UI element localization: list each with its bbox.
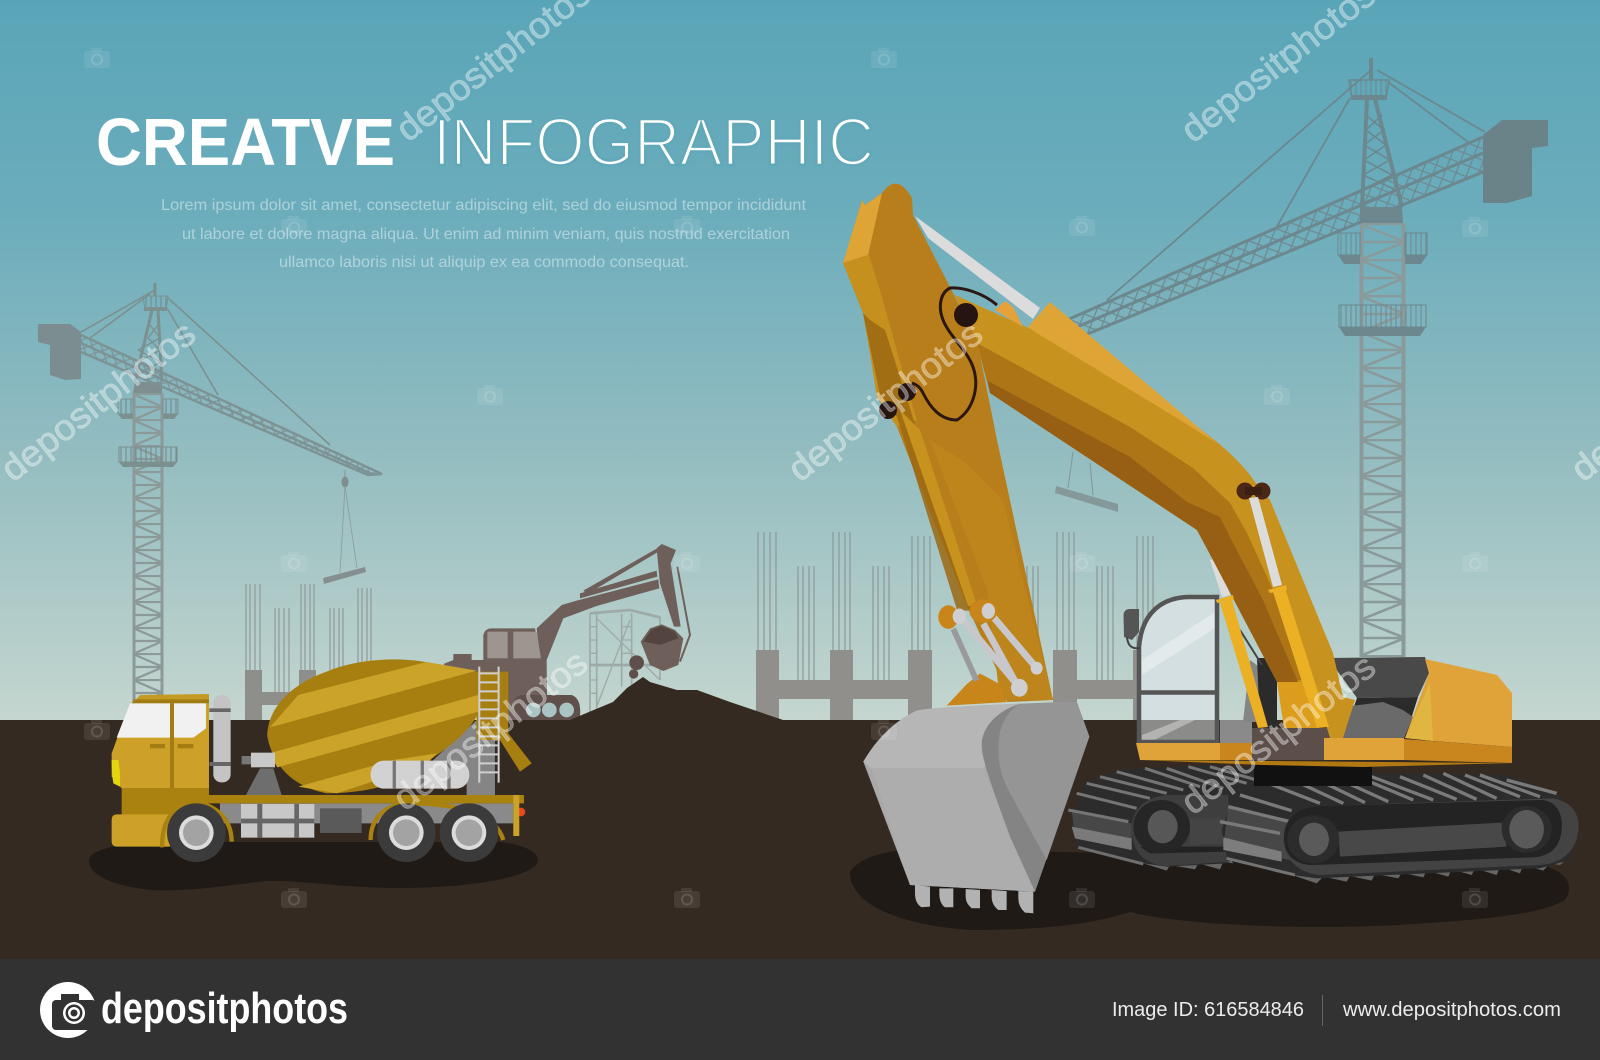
soil mound (560, 677, 795, 724)
excavator bucket (863, 702, 1089, 913)
ground (0, 720, 1600, 960)
rear light (517, 808, 525, 816)
mixer drum (267, 659, 477, 793)
right tower crane (1067, 58, 1548, 657)
near track (1220, 773, 1578, 883)
footer logo wordmark: depositphotos (101, 984, 348, 1033)
machinery behind boom (1220, 630, 1277, 743)
right crane hanging beam (1055, 452, 1118, 512)
diagonal watermarks: depositphotos (780, 312, 990, 489)
foundation columns and rebar right (756, 532, 1155, 720)
left tower crane (38, 283, 382, 720)
bucket teeth (915, 885, 1033, 913)
excavator upper deck (1136, 728, 1512, 767)
sky background (0, 0, 1600, 721)
cab (112, 703, 209, 788)
drum stripes (269, 662, 478, 793)
foundation columns and rebar left (245, 584, 375, 720)
rear wheel 1 (377, 803, 436, 862)
arm cylinder (1249, 497, 1329, 728)
elbow pins (1236, 482, 1270, 500)
diagonal watermarks (0, 0, 1600, 822)
footer bar (0, 959, 1600, 1060)
rear wheel 2 (440, 803, 498, 862)
water tank (371, 761, 469, 789)
fenders (162, 803, 503, 847)
image id: Image ID: 616584846 (1112, 999, 1304, 1021)
excavator crawler tracks (1068, 765, 1578, 883)
drum mount (242, 756, 252, 764)
intro paragraph: ut labore et dolore magna aliqua. Ut enim ad minim veniam, quis nostrud exercitation (182, 226, 790, 243)
diagonal watermarks: depositphotos (385, 641, 595, 818)
hydraulic hose and pivots (879, 288, 997, 420)
excavator cab (1124, 597, 1217, 742)
diagonal watermarks: depositphotos (1173, 645, 1383, 822)
engine housing (1328, 657, 1512, 747)
truck shadow (89, 842, 538, 890)
front wheel (167, 803, 226, 862)
excavator shadow (850, 849, 1569, 930)
intro paragraph (161, 197, 807, 271)
title (96, 105, 874, 180)
boom cylinder rod (915, 216, 1040, 319)
footer logo icon (40, 982, 96, 1038)
cement mixer truck (112, 659, 532, 862)
title: CREATVE (96, 105, 395, 180)
intro paragraph: ullamco laboris nisi ut aliquip ex ea commodo consequat. (279, 254, 689, 271)
website: www.depositphotos.com (1342, 999, 1561, 1021)
distant scaffold (590, 610, 660, 712)
intro paragraph: Lorem ipsum dolor sit amet, consectetur adipiscing elit, sed do eiusmod tempor incididunt (161, 197, 807, 214)
excavator boom (955, 295, 1355, 738)
excavator stick (843, 184, 1053, 702)
far track (1068, 765, 1260, 871)
bucket linkage (938, 599, 1043, 706)
watermark camera icons (84, 48, 1488, 908)
title: INFOGRAPHIC (433, 105, 874, 180)
ladder (479, 667, 499, 783)
distant excavator (443, 544, 690, 723)
excavator turntable (1254, 762, 1372, 786)
frame (220, 803, 513, 823)
exhaust tank (213, 695, 231, 782)
lift cylinder (1216, 595, 1268, 728)
rear support (433, 720, 495, 795)
